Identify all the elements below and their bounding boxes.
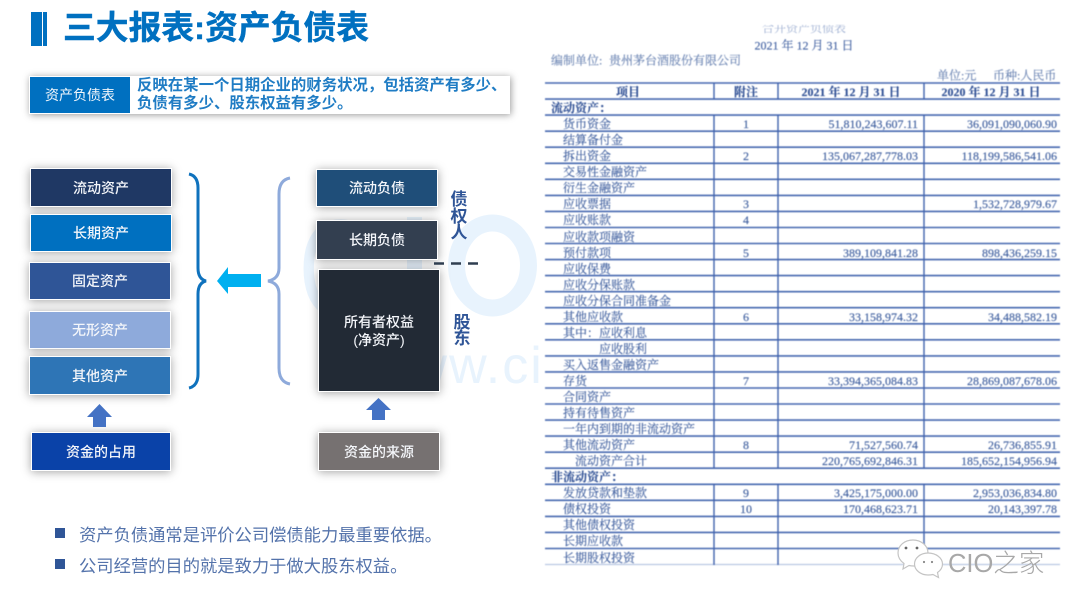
source box: 资金的来源 [318,432,440,471]
label: 股东 [454,313,470,348]
label: 债权人: 债 [450,190,468,209]
asset box: 长期资产 [30,214,172,252]
current asset rows: 7 [743,374,749,388]
asset box: 无形资产 [29,311,171,349]
non-current asset rows [563,485,1057,565]
brace: liabilities and equity [268,178,290,384]
current asset rows: 4 [743,213,749,227]
table header row: 2021 年 12 月 31 日 [801,84,901,99]
liability box: 长期负债 [316,220,438,260]
current asset rows: 买入返售金融资产 [563,357,659,372]
asset box: 其他资产 [29,356,171,395]
liability box: 长期负债: 长期负债 [349,232,405,248]
callout: balance sheet definition [29,76,510,114]
statement heading: 编制单位: [551,54,602,68]
current asset rows: 应收保费 [563,261,612,276]
current asset rows: 应收账款 [563,212,611,227]
current asset rows: 220,765,692,846.31 [822,454,918,468]
asset box: 流动资产: 流动资产 [73,180,129,196]
non-current asset rows: 3,425,175,000.00 [834,486,918,500]
current asset rows: 应收款项融资 [563,229,636,244]
non-current asset rows: 20,143,397.78 [988,502,1057,516]
callout label: 资产负债表 [45,87,115,103]
watermark: CIO logo background: www.cio [369,337,575,395]
table header row: 附注 [734,84,758,99]
current asset rows: 持有待售资产 [563,405,635,420]
current asset rows: 其他流动资产 [563,437,635,452]
bullet list [55,525,442,576]
current asset rows: 应收股利 [599,341,647,356]
table header row [616,84,1041,99]
current asset rows: 预付款项 [563,245,612,260]
current asset rows: 71,527,560.74 [849,438,918,452]
current asset rows: 28,869,087,678.06 [967,374,1057,388]
current asset rows: 389,109,841.28 [843,246,918,260]
bullet 2: 公司经营的目的就是致力于做大股东权益。 [79,556,407,576]
non-current asset rows: 发放贷款和垫款 [563,485,647,500]
equity box: 所有者权益: 所有者权益 [344,314,414,330]
statement heading [551,0,1056,82]
label: 股东: 东 [454,329,470,348]
watermark: CIO logo background: C [298,190,377,347]
label: 股东: 股 [454,313,470,332]
source box: 资金的来源: 资金的来源 [344,444,414,460]
non-current asset rows: 170,468,623.71 [843,502,918,516]
current asset rows: 应收分保账款 [563,277,635,292]
asset box: 长期资产: 长期资产 [73,225,129,241]
non-current asset rows: 2,953,036,834.80 [973,486,1057,500]
title accent bars [31,12,47,46]
arrow: up left [87,404,112,427]
non-current asset rows: 长期应收款 [563,533,623,548]
current asset rows: 应收分保合同准备金 [563,293,671,308]
equity box: 所有者权益 [318,269,440,392]
current asset rows: 51,810,243,607.11 [828,117,918,131]
current asset rows: 其中：应收利息 [563,325,648,340]
current asset rows: 拆出资金 [563,148,611,163]
section: current assets: 流动资产： [551,100,611,115]
current asset rows: 118,199,586,541.06 [961,149,1057,163]
current asset rows: 33,394,365,084.83 [828,374,918,388]
current asset rows: 应收票据 [563,196,611,211]
statement heading: 币种:人民币 [993,68,1056,82]
statement heading: 2021 年 12 月 31 日 [754,38,854,52]
statement heading: 贵州茅台酒股份有限公司 [609,52,741,68]
current asset rows: 8 [743,438,749,452]
non-current asset rows: 债权投资 [563,501,612,516]
arrow: up right [366,398,391,420]
current asset rows: 结算备付金 [563,132,623,147]
title: 三大报表:资产负债表 [63,9,369,46]
liability box: 流动负债 [316,169,438,207]
brace: assets [189,174,206,388]
current asset rows: 6 [743,310,749,324]
non-current asset rows: 长期股权投资 [563,550,636,565]
current asset rows: 合同资产 [563,389,611,404]
non-current asset rows: 10 [740,502,752,516]
callout description: 负债有多少、股东权益有多少。 [137,95,352,112]
equity box: 所有者权益: (净资产) [353,332,405,348]
watermark text: CIO之家 [948,550,1044,578]
dashed divider: creditors and shareholders [434,262,479,265]
current asset rows: 货币资金 [563,116,611,131]
asset box: 固定资产: 固定资产 [72,273,128,289]
table header row: 项目 [616,84,640,99]
current asset rows: 2 [743,149,749,163]
asset box: 资金的占用: 资金的占用 [66,444,136,460]
current asset rows: 一年内到期的非流动资产 [563,421,695,436]
current asset rows: 26,736,855.91 [988,438,1057,452]
asset box: 资金的占用 [31,432,171,471]
current asset rows: 5 [743,246,749,260]
non-current asset rows: 其他债权投资 [563,517,636,532]
statement heading: 合并资产负债表 [762,20,846,35]
current asset rows: 898,436,259.15 [982,246,1057,260]
label: 债权人 [450,190,468,242]
current asset rows: 其他应收款 [563,309,623,324]
current asset rows: 流动资产合计 [575,453,647,468]
current asset rows: 存货 [563,373,588,388]
table header row: 2020 年 12 月 31 日 [941,84,1041,99]
arrow: left cyan [217,267,261,294]
current asset rows: 185,652,154,956.94 [961,454,1057,468]
current asset rows: 1,532,728,979.67 [973,197,1057,211]
asset box: 无形资产: 无形资产 [72,322,128,338]
current asset rows: 34,488,582.19 [988,310,1057,324]
callout description [137,76,506,112]
liability box: 流动负债: 流动负债 [349,180,405,196]
asset box: 其他资产: 其他资产 [72,368,128,384]
statement heading: 单位:元 [937,68,976,82]
current asset rows: 36,091,090,060.90 [967,117,1057,131]
current asset rows: 1 [743,117,749,131]
icon: wechat bubbles [898,540,942,578]
callout description: 反映在某一个日期企业的财务状况，包括资产有多少、 [137,77,506,94]
label: 债权人: 权 [450,206,468,226]
non-current asset rows: 9 [743,486,749,500]
label: 债权人: 人 [450,223,468,242]
current asset rows: 衍生金融资产 [563,180,635,195]
callout label [30,77,130,113]
section: non-current assets: 非流动资产： [551,469,623,484]
current asset rows: 交易性金融资产 [563,164,647,179]
current asset rows: 3 [743,197,749,211]
current asset rows: 33,158,974.32 [849,310,918,324]
current asset rows: 135,067,287,778.03 [822,149,918,163]
current asset rows [563,116,1057,468]
asset box: 流动资产 [30,168,172,207]
bullet 1: 资产负债通常是评价公司偿债能力最重要依据。 [79,525,442,545]
asset box: 固定资产 [29,262,171,300]
